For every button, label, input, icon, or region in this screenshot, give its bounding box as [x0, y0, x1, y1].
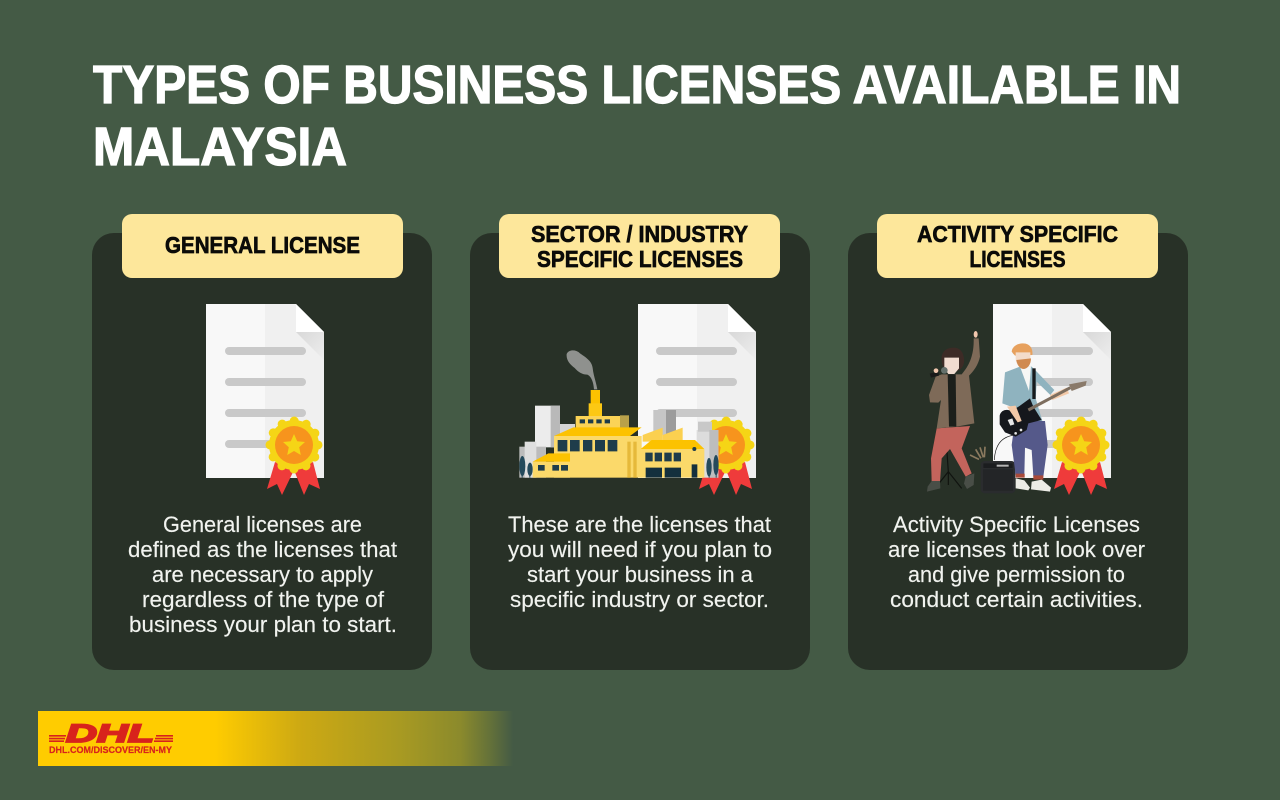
- heading: general license: [122, 214, 403, 278]
- title: MALAYSIA: [93, 117, 347, 177]
- text: general license description: are necessary to apply: [152, 562, 374, 587]
- heading: activity specific licenses: [877, 214, 1158, 278]
- text: sector license description: [508, 512, 772, 612]
- illustration: amplifier and plant: [970, 435, 1015, 493]
- text: general license description: defined as the licenses that: [128, 537, 398, 562]
- logo: DHL: [49, 720, 173, 755]
- text: sector license description: start your business in a: [527, 562, 753, 587]
- heading: activity specific licenses: LICENSES: [970, 246, 1066, 272]
- text: general license description: General licenses are: [163, 512, 362, 537]
- text: activity license description: [888, 512, 1145, 612]
- panel: sector / industry specific licenses: [470, 214, 810, 670]
- icon: licence document with factory: [519, 304, 756, 495]
- icon: licence document with musicians: [927, 304, 1111, 495]
- text: activity license description: Activity Specific Licenses: [893, 512, 1140, 537]
- text: sector license description: These are the licenses that: [508, 512, 772, 537]
- text: general license description: [128, 512, 398, 637]
- heading: sector / industry specific licenses: SPECIFIC LICENSES: [537, 246, 743, 272]
- heading: general license: GENERAL LICENSE: [165, 232, 360, 258]
- logo: DHL: DHL: [66, 720, 154, 748]
- text: activity license description: are licenses that look over: [888, 537, 1145, 562]
- footer banner: DHL logo: [38, 711, 518, 766]
- text: sector license description: you will need if you plan to: [508, 537, 772, 562]
- title: [93, 55, 1181, 177]
- text: activity license description: and give permission to: [908, 562, 1125, 587]
- heading: sector / industry specific licenses: SECTOR / INDUSTRY: [531, 221, 748, 247]
- illustration: guitarist: [1000, 343, 1087, 492]
- illustration: singer: [927, 331, 980, 492]
- text: general license description: regardless of the type of: [142, 587, 385, 612]
- logo: DHL: DHL.COM/DISCOVER/EN-MY: [49, 745, 172, 755]
- icon: licence document with medal: [206, 304, 324, 495]
- text: sector license description: specific industry or sector.: [510, 587, 769, 612]
- text: general license description: business your plan to start.: [129, 612, 397, 637]
- panel: general license: [92, 214, 432, 670]
- text: activity license description: conduct certain activities.: [890, 587, 1143, 612]
- heading: sector / industry specific licenses: [499, 214, 780, 278]
- panel: activity specific licenses: [848, 214, 1188, 670]
- illustration: factory: [519, 350, 719, 478]
- heading: activity specific licenses: ACTIVITY SPECIFIC: [917, 221, 1118, 247]
